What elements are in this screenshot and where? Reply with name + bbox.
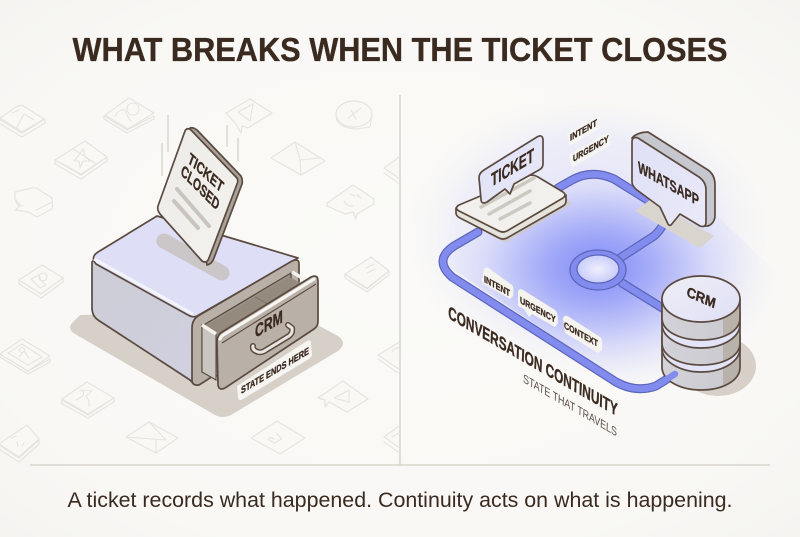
drawer floor bbox=[206, 277, 301, 334]
tag: context: CONTEXT bbox=[564, 320, 598, 350]
central glow bbox=[442, 176, 795, 400]
drawer front bbox=[217, 276, 318, 389]
icon: note card bbox=[345, 257, 389, 292]
drawer label CRM: CRM bbox=[255, 306, 283, 342]
bubble text: WHATSAPP bbox=[638, 159, 699, 210]
tag: urgency: URGENCY bbox=[520, 295, 556, 326]
cabinet front frame bbox=[192, 260, 299, 385]
central hub ring bbox=[570, 250, 626, 290]
ticket tray bbox=[456, 175, 572, 243]
icon: check card bbox=[251, 421, 305, 454]
label: state ends here: STATE ENDS HERE bbox=[241, 346, 309, 397]
card text: TICKET bbox=[186, 150, 226, 197]
label: state that travels: STATE THAT TRAVELS bbox=[523, 371, 617, 440]
ticket card bbox=[158, 128, 242, 265]
cabinet top face bbox=[93, 216, 298, 317]
tag: intent bbox=[482, 268, 513, 300]
icon: document bbox=[0, 106, 45, 137]
panel: right, conversation continuity bbox=[400, 90, 795, 440]
icon: envelope bbox=[126, 422, 178, 453]
caption: A ticket records what happened. Continuity acts on what is happening. bbox=[68, 489, 732, 512]
cabinet left face bbox=[92, 256, 205, 385]
track end over cylinder bbox=[656, 374, 675, 386]
icon: tablet bbox=[0, 339, 50, 374]
crm database shadow bbox=[680, 336, 756, 396]
whatsapp bubble shadow bbox=[635, 200, 714, 248]
icon: document card bbox=[62, 382, 114, 418]
panel: left, ticket closed in CRM bbox=[0, 95, 770, 465]
icon: smile bubble bbox=[327, 185, 374, 219]
ticket speech bubble bbox=[479, 136, 543, 203]
continuity track bbox=[443, 174, 675, 389]
icon: partial card bbox=[384, 426, 399, 453]
icon: partial card bbox=[384, 156, 399, 184]
tag: intent: INTENT bbox=[484, 274, 510, 300]
whatsapp speech bubble bbox=[632, 132, 715, 226]
database label: CRM bbox=[685, 283, 717, 311]
motion lines bbox=[162, 115, 238, 176]
icon: person card bbox=[19, 265, 63, 298]
card face bbox=[158, 129, 238, 262]
icon: star window bbox=[55, 141, 107, 179]
icon: person card bbox=[104, 98, 154, 133]
icon: play bubble bbox=[318, 381, 368, 412]
floating tag: urgency: URGENCY bbox=[573, 133, 609, 165]
divider lines bbox=[30, 95, 770, 465]
icon: envelope bbox=[271, 142, 325, 175]
card edge bbox=[190, 128, 242, 265]
bubble text: TICKET bbox=[491, 145, 534, 192]
CRM database cylinder bbox=[662, 276, 740, 390]
icon: bell bubble bbox=[336, 101, 372, 129]
drawer handle bbox=[253, 325, 292, 352]
card lines bbox=[174, 189, 209, 228]
background message icons bbox=[0, 98, 426, 462]
label: conversation continuity: CONVERSATION CONTINUITY bbox=[448, 302, 618, 421]
drawer inside wall bbox=[202, 325, 216, 380]
background halo bbox=[400, 90, 780, 380]
icon: partial card bbox=[378, 342, 399, 374]
drawer opening bbox=[202, 273, 291, 378]
title: WHAT BREAKS WHEN THE TICKET CLOSES bbox=[72, 32, 728, 69]
icon: play bubble bbox=[226, 99, 272, 133]
ticket card: CLOSED bbox=[179, 162, 222, 215]
CRM cabinet bbox=[92, 216, 318, 400]
filing box shadow bbox=[70, 310, 343, 417]
icon: face card bbox=[0, 425, 39, 462]
floating tag: intent: INTENT bbox=[570, 117, 597, 144]
drawer rim bbox=[202, 272, 304, 334]
ticket shadow on cabinet bbox=[164, 241, 222, 273]
icon: chat bubble bbox=[15, 188, 52, 217]
